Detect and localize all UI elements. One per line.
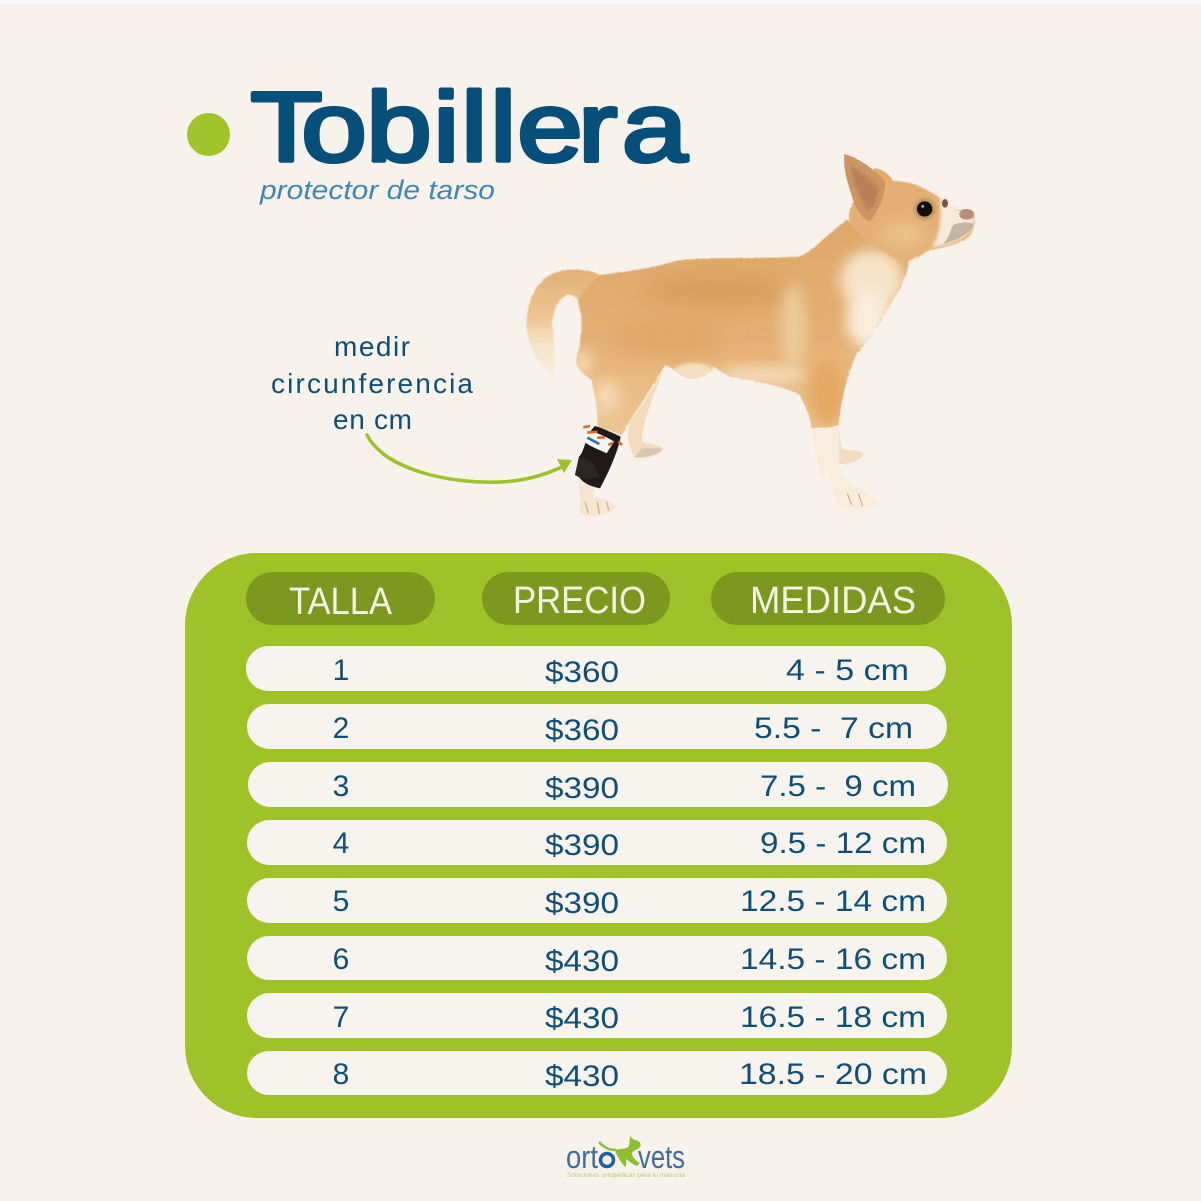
logo dog — [615, 1136, 641, 1167]
head — [849, 181, 975, 260]
row 8: 18.5 - 20 cm — [739, 1058, 927, 1091]
title: Tobillera — [251, 72, 688, 182]
ankle brace — [575, 426, 622, 488]
row 4 — [247, 820, 947, 865]
cheek shading — [880, 220, 927, 250]
far hind leg — [628, 367, 665, 458]
logo — [566, 1136, 686, 1179]
label line: medir: medir — [334, 331, 410, 362]
label line: circunferencia: circunferencia — [271, 368, 473, 399]
row 1 — [246, 646, 946, 691]
row 8: 8 — [333, 1058, 349, 1091]
muzzle spot — [942, 199, 948, 208]
brace strap — [575, 457, 600, 479]
row 4: 4 — [333, 827, 349, 860]
row 8 — [247, 1051, 947, 1095]
header: medidas: MEDIDAS — [750, 580, 916, 622]
brace label — [584, 431, 614, 453]
title bullet — [187, 113, 230, 156]
row 2: 5.5 - 7 cm — [754, 712, 913, 745]
row 5: 5 — [333, 885, 349, 918]
front leg white sock — [812, 425, 877, 508]
row 3 — [248, 762, 948, 807]
row 5: 12.5 - 14 cm — [740, 885, 926, 918]
row 1: 1 — [333, 654, 349, 687]
near ear — [844, 154, 885, 222]
row 6 — [247, 936, 947, 980]
hind leg lower — [578, 427, 622, 516]
eye — [914, 198, 935, 220]
row 7: 16.5 - 18 cm — [740, 1001, 926, 1034]
row 2 — [247, 704, 947, 749]
row 5: $390 — [545, 887, 619, 920]
logo tagline: Soluciones ortopédicas para tu mascota — [567, 1173, 686, 1179]
logo wordmark right: vets — [638, 1139, 685, 1175]
row 7 — [247, 993, 947, 1038]
row 2: $360 — [545, 714, 619, 747]
arrow — [367, 435, 572, 482]
row 8: $430 — [545, 1060, 619, 1093]
label line: en cm: en cm — [333, 404, 412, 435]
far ear — [873, 168, 893, 187]
row 4: $390 — [545, 829, 619, 862]
row 5 — [247, 878, 947, 923]
row 2: 2 — [333, 712, 349, 745]
row 1: $360 — [545, 656, 619, 689]
row 3: 3 — [333, 770, 349, 803]
body and neck — [576, 220, 910, 435]
dog photo illustration — [527, 154, 975, 516]
header: talla: TALLA — [289, 581, 393, 623]
row 6: 14.5 - 16 cm — [740, 943, 926, 976]
far front leg — [835, 427, 863, 464]
paws shadows — [585, 493, 863, 514]
muzzle — [932, 195, 974, 247]
row 6: 6 — [333, 943, 349, 976]
row 7: $430 — [545, 1002, 619, 1035]
row 3: $390 — [545, 772, 619, 805]
logo dog tail — [599, 1142, 616, 1150]
row 3: 7.5 - 9 cm — [760, 770, 916, 803]
nose — [959, 209, 974, 220]
row 1: 4 - 5 cm — [786, 654, 909, 687]
row 4: 9.5 - 12 cm — [760, 827, 926, 860]
logo wordmark left: ort — [566, 1139, 598, 1175]
header: talla — [246, 572, 435, 625]
row 7: 7 — [333, 1001, 349, 1034]
brace sleeve — [575, 426, 621, 488]
logo ring — [600, 1154, 614, 1166]
header: precio — [482, 572, 670, 625]
measure label — [271, 331, 473, 435]
tail — [527, 270, 607, 377]
row 6: $430 — [545, 945, 619, 978]
subtitle: protector de tarso — [259, 175, 495, 205]
header: precio: PRECIO — [513, 580, 646, 622]
fur shading — [572, 250, 903, 427]
table panel — [185, 553, 1012, 1118]
header: medidas — [711, 572, 945, 625]
